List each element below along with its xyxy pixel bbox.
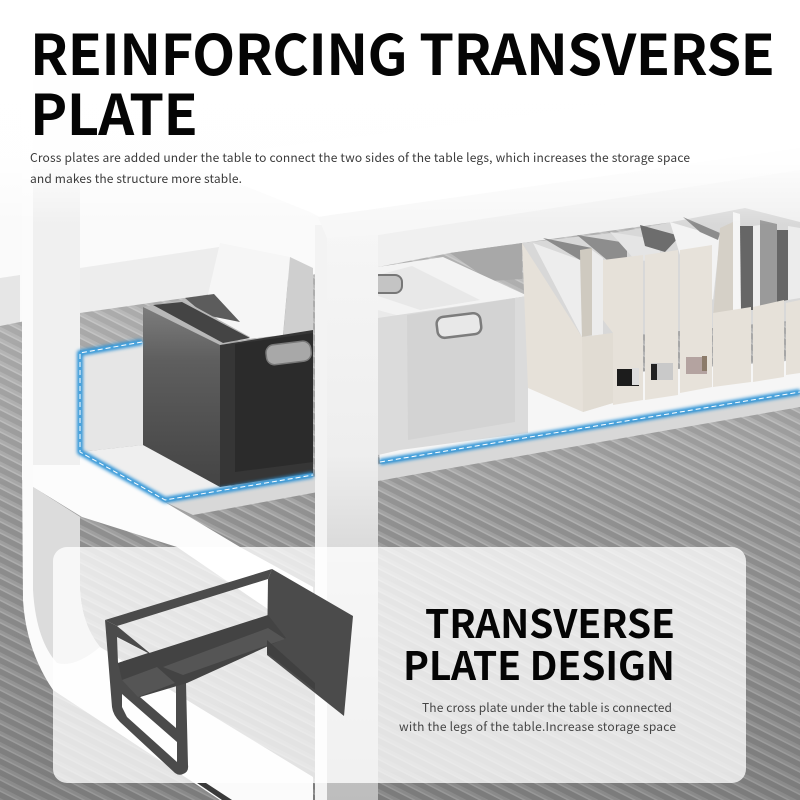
rear band under tabletop <box>378 165 800 267</box>
translucent info panel <box>53 547 746 783</box>
carpet floor <box>0 195 800 800</box>
magazine holders <box>522 208 800 412</box>
foot shadow <box>197 783 232 800</box>
main title: REINFORCING TRANSVERSE <box>30 11 775 92</box>
panel description: The cross plate under the table is connected <box>422 699 672 716</box>
top white fade <box>0 0 800 225</box>
panel description <box>399 699 676 735</box>
table legs <box>22 0 378 800</box>
main title: PLATE <box>30 71 198 152</box>
lower shelf <box>33 342 800 640</box>
blue highlighted plate outline <box>80 342 800 500</box>
icon: desk frame with transverse plate <box>105 569 353 775</box>
white storage box <box>372 243 528 455</box>
description: and makes the structure more stable. <box>30 170 242 187</box>
black storage box <box>143 243 313 487</box>
panel heading: TRANSVERSE <box>425 594 675 650</box>
panel description: with the legs of the table.Increase storage space <box>399 718 676 735</box>
tabletop front edge <box>318 148 800 238</box>
panel heading <box>403 594 675 692</box>
panel heading: PLATE DESIGN <box>403 636 675 692</box>
description <box>30 149 690 187</box>
main title <box>30 11 775 152</box>
tabletop <box>180 80 800 217</box>
description: Cross plates are added under the table to connect the two sides of the table legs, which increases the storage space <box>30 149 690 166</box>
